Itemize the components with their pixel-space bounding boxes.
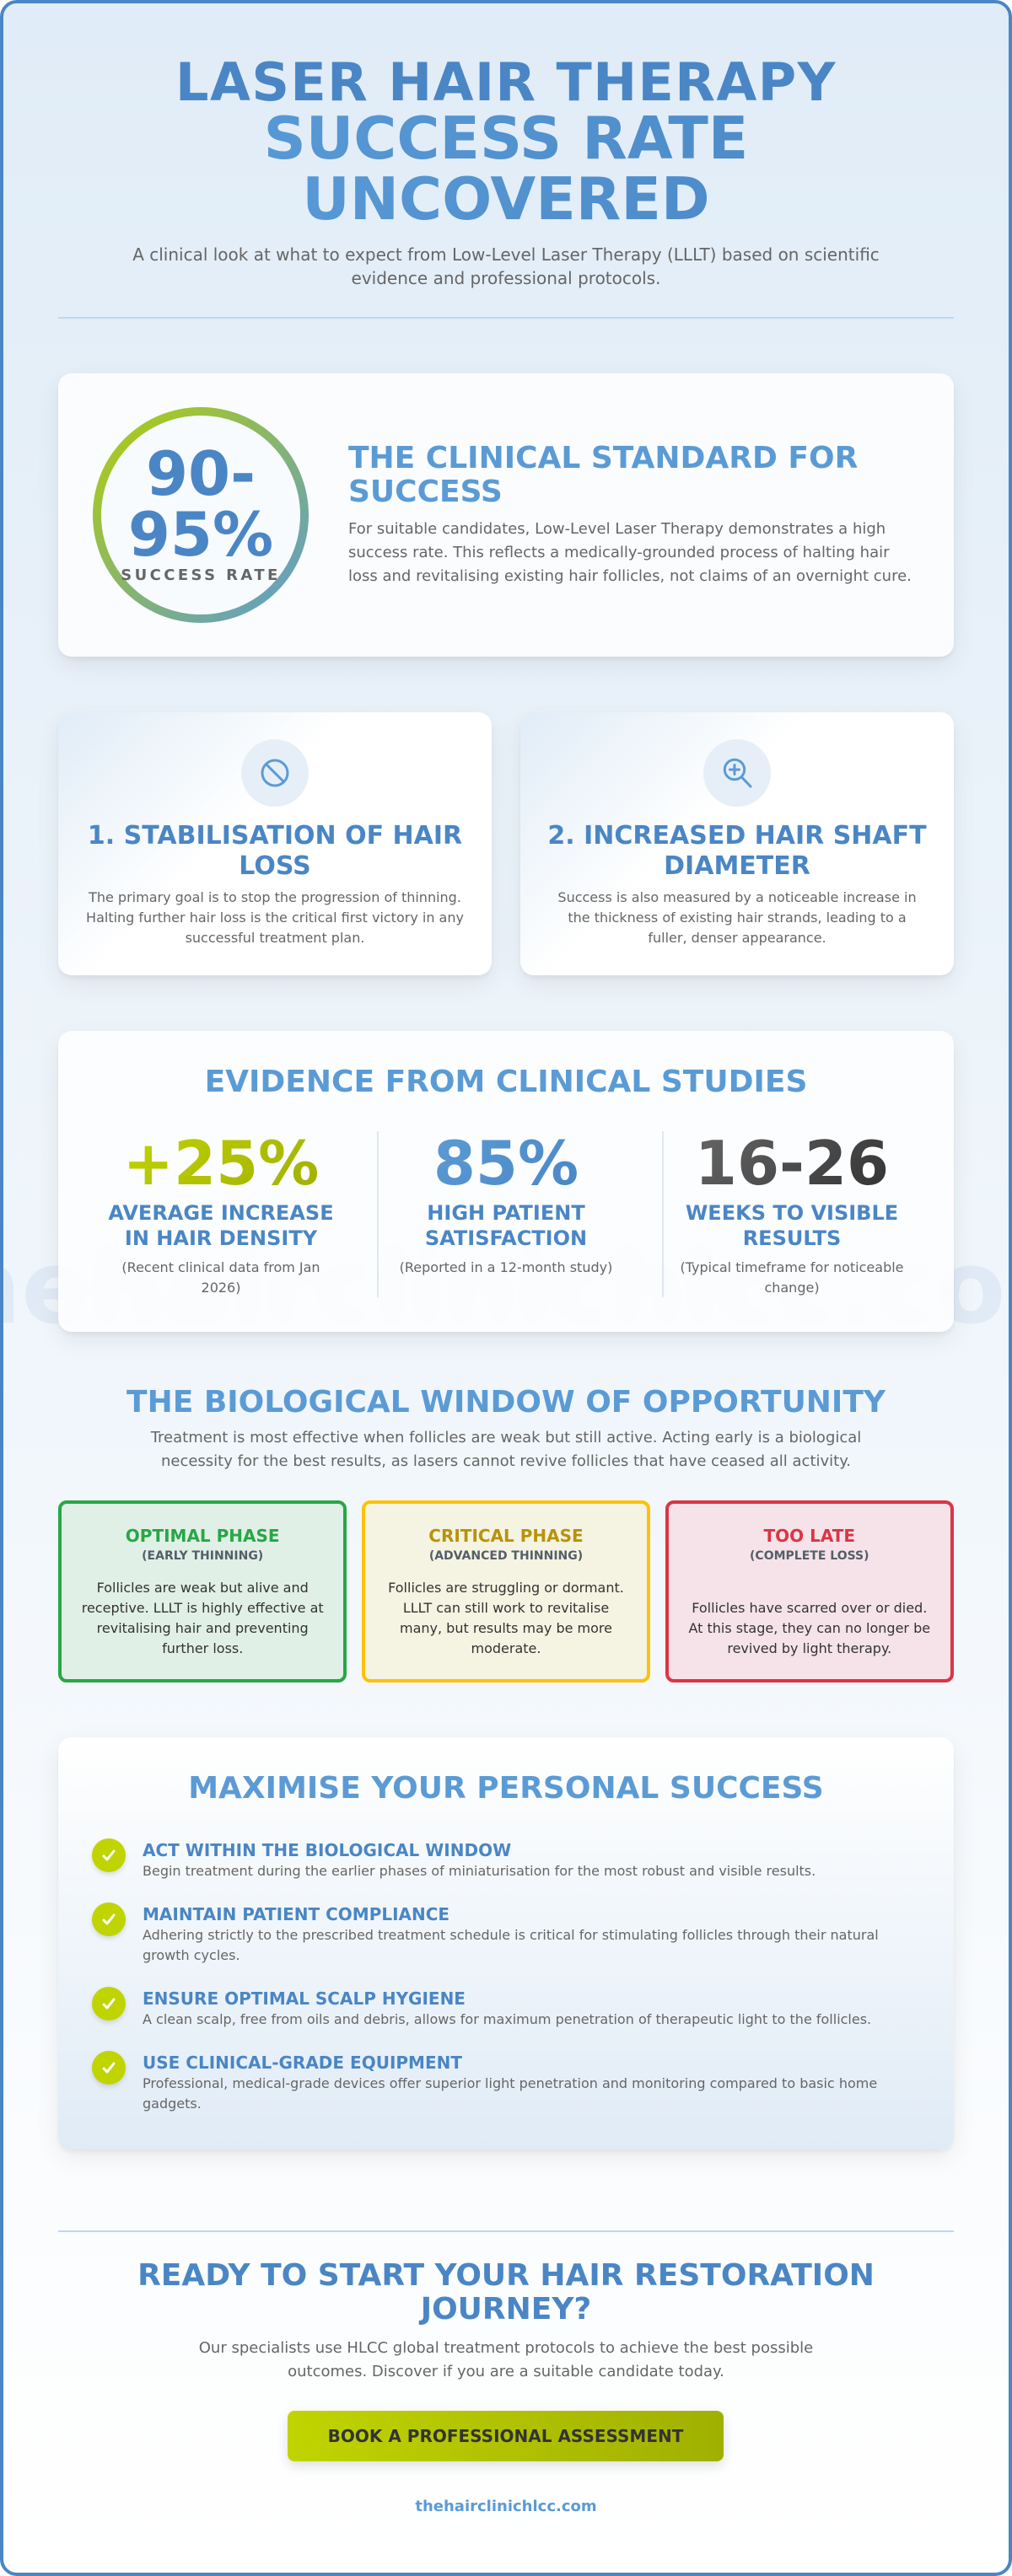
heading: JOURNEY?	[421, 2291, 591, 2326]
text: Halting further hair loss is the critical first victory in any	[86, 909, 464, 926]
phase: optimal	[58, 1500, 347, 1682]
stat: weeks: (Typical timeframe for noticeable	[680, 1259, 904, 1275]
heading	[137, 2257, 875, 2326]
text: outcomes. Discover if you are a suitable candidate today.	[288, 2363, 724, 2380]
phase: too late: TOO LATE	[763, 1526, 855, 1546]
phase: critical: (ADVANCED THINNING)	[429, 1549, 583, 1563]
panel: evidence	[58, 1031, 954, 1332]
title: LASER HAIR THERAPY	[175, 51, 837, 113]
stat: weeks: WEEKS TO VISIBLE	[686, 1201, 898, 1225]
stat: satisfaction: HIGH PATIENT	[427, 1201, 585, 1225]
phase: too late: At this stage, they can no longer be	[688, 1620, 930, 1635]
phase: too late: revived by light therapy.	[727, 1640, 891, 1656]
item 1: Begin treatment during the earlier phases of miniaturisation for the most robust and visible results.	[143, 1863, 816, 1879]
item 3: ENSURE OPTIMAL SCALP HYGIENE	[143, 1988, 466, 2009]
item 3: A clean scalp, free from oils and debris, allows for maximum penetration of therapeutic light to the follicles.	[143, 2011, 871, 2027]
stat: density: IN HAIR DENSITY	[125, 1226, 317, 1250]
phase: too late: Follicles have scarred over or died.	[692, 1600, 927, 1615]
footer call to action	[137, 2257, 875, 2515]
phase: critical: moderate.	[471, 1640, 541, 1656]
website: thehairclinichlcc.com	[415, 2498, 597, 2515]
heading: 1. STABILISATION OF HAIR	[88, 821, 462, 851]
text	[348, 520, 912, 585]
success rate ring: SUCCESS RATE	[121, 566, 281, 584]
heading	[88, 821, 462, 881]
item 4: Professional, medical-grade devices offer superior light penetration and monitoring compared to basic home	[143, 2075, 877, 2091]
text: For suitable candidates, Low-Level Laser Therapy demonstrates a high	[348, 520, 886, 538]
phase: too late	[665, 1500, 954, 1682]
title: SUCCESS RATE	[264, 105, 748, 173]
text: Our specialists use HLCC global treatment protocols to achieve the best possible	[199, 2339, 813, 2357]
stat: density: (Recent clinical data from Jan	[121, 1259, 320, 1275]
panel: clinical standard	[58, 373, 954, 657]
item 1	[91, 1838, 816, 1879]
text: successful treatment plan.	[186, 929, 364, 946]
item 3	[91, 1987, 871, 2027]
phase: optimal: receptive. LLLT is highly effective at	[82, 1600, 324, 1615]
text	[557, 888, 917, 946]
item 2: Adhering strictly to the prescribed treatment schedule is critical for stimulating follicles through their natural	[143, 1927, 879, 1943]
stat: weeks: RESULTS	[743, 1226, 841, 1250]
success rate ring	[93, 407, 309, 623]
stat: weeks	[680, 1128, 904, 1295]
icon: ban	[241, 739, 309, 807]
button: BOOK A PROFESSIONAL ASSESSMENT	[328, 2426, 683, 2446]
heading: THE BIOLOGICAL WINDOW OF OPPORTUNITY	[126, 1384, 886, 1419]
phase: optimal: Follicles are weak but alive and	[97, 1580, 309, 1595]
subtitle: A clinical look at what to expect from Low-Level Laser Therapy (LLLT) based on scientific	[132, 244, 880, 265]
phase: critical: many, but results may be more	[400, 1620, 612, 1635]
text	[150, 1429, 861, 1470]
heading: SUCCESS	[348, 474, 503, 509]
heading: THE CLINICAL STANDARD FOR	[348, 440, 858, 475]
item 2: MAINTAIN PATIENT COMPLIANCE	[143, 1904, 449, 1924]
phase: critical: Follicles are struggling or dormant.	[388, 1580, 624, 1595]
item 4: USE CLINICAL-GRADE EQUIPMENT	[143, 2053, 462, 2073]
stat: satisfaction	[400, 1128, 612, 1275]
heading: READY TO START YOUR HAIR RESTORATION	[137, 2257, 875, 2293]
text	[86, 888, 464, 946]
phase: optimal: (EARLY THINNING)	[142, 1549, 263, 1563]
phase: too late: (COMPLETE LOSS)	[750, 1549, 869, 1563]
phase: optimal: OPTIMAL PHASE	[126, 1526, 280, 1546]
stat: satisfaction: (Reported in a 12-month study)	[400, 1259, 612, 1275]
title: UNCOVERED	[302, 165, 710, 233]
item 1: ACT WITHIN THE BIOLOGICAL WINDOW	[143, 1840, 511, 1860]
item 2	[91, 1902, 879, 1963]
panel: stabilisation	[58, 712, 492, 975]
text: the thickness of existing hair strands, leading to a	[568, 909, 907, 926]
heading	[547, 821, 927, 881]
heading: 2. INCREASED HAIR SHAFT	[547, 821, 927, 851]
success rate ring: 95%	[128, 499, 273, 570]
text: success rate. This reflects a medically-grounded process of halting hair	[348, 544, 889, 561]
stat: satisfaction: 85%	[433, 1128, 579, 1199]
text: loss and revitalising existing hair follicles, not claims of an overnight cure.	[348, 567, 912, 585]
panel: shaft diameter	[520, 712, 954, 975]
item 4	[91, 2051, 877, 2112]
panel: maximise success	[58, 1737, 954, 2149]
icon: magnifier	[703, 739, 771, 807]
phase: critical: CRITICAL PHASE	[428, 1526, 584, 1546]
button	[288, 2411, 724, 2461]
subtitle: evidence and professional protocols.	[352, 268, 660, 288]
stat: density: 2026)	[202, 1280, 240, 1295]
heading: MAXIMISE YOUR PERSONAL SUCCESS	[188, 1770, 824, 1806]
item 2: growth cycles.	[143, 1947, 240, 1963]
text: Treatment is most effective when follicles are weak but still active. Acting early is a biological	[151, 1429, 861, 1446]
text	[199, 2339, 813, 2380]
heading: DIAMETER	[664, 851, 810, 881]
text: The primary goal is to stop the progression of thinning.	[89, 888, 461, 905]
success rate ring: 90-	[146, 438, 256, 509]
text: necessity for the best results, as lasers cannot revive follicles that have ceased all activity.	[161, 1452, 851, 1470]
text: Success is also measured by a noticeable increase in	[557, 888, 917, 905]
stat: density	[108, 1128, 334, 1295]
subtitle	[132, 244, 880, 288]
heading	[348, 440, 858, 509]
text: fuller, denser appearance.	[648, 929, 826, 946]
phase: optimal: revitalising hair and preventing	[97, 1620, 309, 1635]
phase: critical	[362, 1500, 650, 1682]
stat: density: +25%	[123, 1128, 319, 1199]
stat: density: AVERAGE INCREASE	[108, 1201, 334, 1225]
heading: EVIDENCE FROM CLINICAL STUDIES	[205, 1064, 807, 1099]
stat: weeks: 16-26	[695, 1128, 889, 1199]
stat: weeks: change)	[764, 1280, 820, 1295]
title	[175, 51, 837, 233]
heading: LOSS	[239, 851, 311, 881]
section: biological window	[58, 1384, 954, 1682]
item 4: gadgets.	[143, 2096, 202, 2112]
phase: optimal: further loss.	[162, 1640, 243, 1656]
phase: critical: LLLT can still work to revitalise	[403, 1600, 609, 1615]
stat: satisfaction: SATISFACTION	[425, 1226, 587, 1250]
